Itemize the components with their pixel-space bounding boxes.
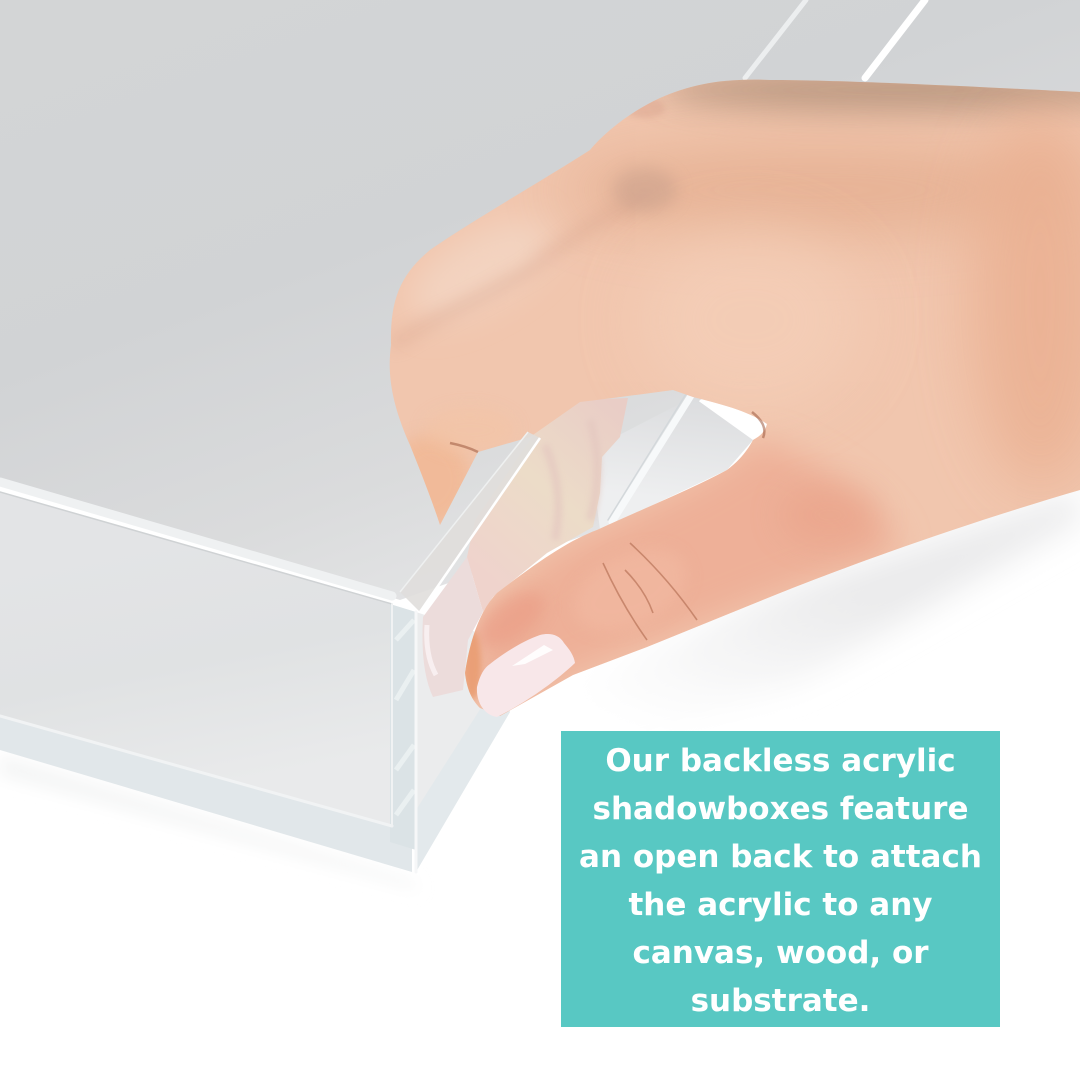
acrylic box: bottom rim xyxy=(0,716,412,872)
callout: teal text panel xyxy=(561,731,1000,1027)
callout line 4: the acrylic to any xyxy=(628,887,933,923)
thumb knuckle creases xyxy=(603,543,697,640)
acrylic box: top face xyxy=(0,0,1080,600)
hand with thumb xyxy=(380,68,1080,730)
callout line 6: substrate. xyxy=(691,983,870,1019)
acrylic edge strip xyxy=(400,432,540,612)
reflection of fingers in acrylic side panel xyxy=(422,398,628,697)
acrylic box: front face xyxy=(0,492,392,826)
callout line 5: canvas, wood, or xyxy=(632,935,929,971)
acrylic box: edges and highlights xyxy=(0,0,925,872)
shading on thumb xyxy=(470,440,900,716)
acrylic box: corner column xyxy=(390,604,416,850)
callout line 3: an open back to attach xyxy=(579,839,982,875)
shading on back of hand xyxy=(660,68,1080,112)
acrylic box: open side panel xyxy=(416,612,510,870)
index finger crease and web shadow xyxy=(450,412,764,452)
callout line 1: Our backless acrylic xyxy=(605,743,956,779)
callout line 2: shadowboxes feature xyxy=(593,791,968,827)
thumbnail xyxy=(477,634,575,717)
